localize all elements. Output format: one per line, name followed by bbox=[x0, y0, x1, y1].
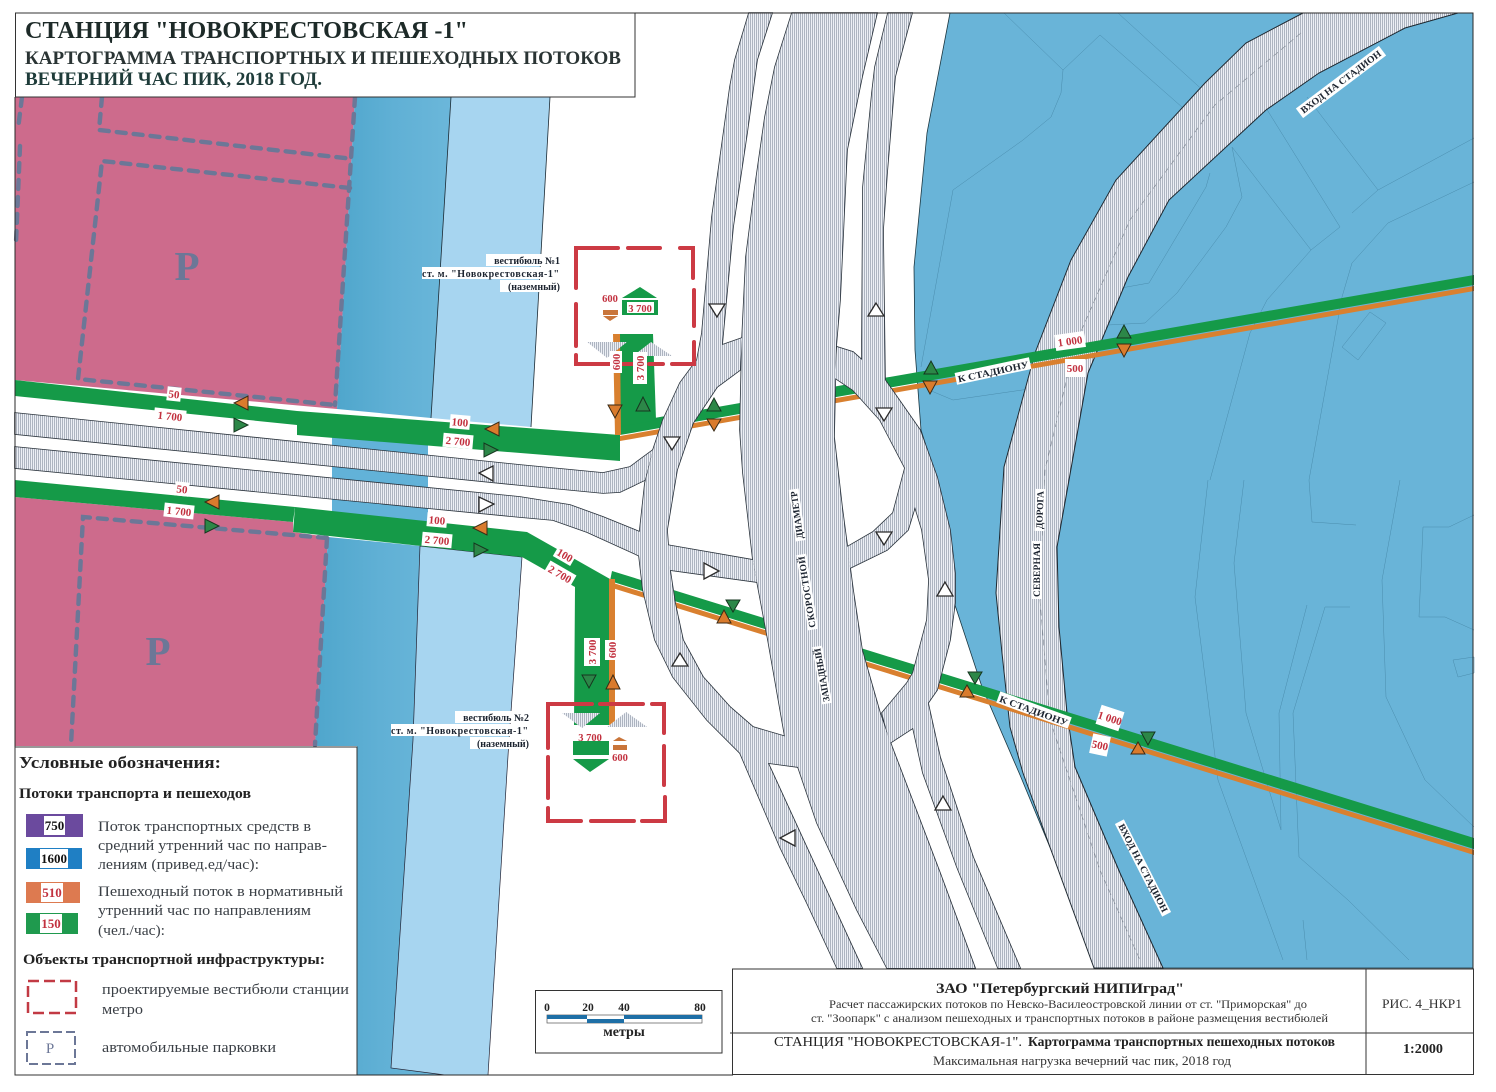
direction arrows: road traffic bbox=[479, 303, 953, 846]
600 stem 1: 600 bbox=[611, 353, 623, 370]
2700 lower: 2 700 bbox=[424, 534, 450, 548]
swatch 510 bbox=[26, 882, 80, 903]
swatch 1600: 1600 bbox=[41, 851, 67, 866]
road: Severnaya doroga bbox=[996, 13, 1458, 968]
to the stadium 1: К СТАДИОНУ bbox=[957, 361, 1030, 385]
entrance hatches bbox=[562, 713, 600, 728]
road centre dashes bbox=[1040, 33, 1301, 960]
500 east 2 bbox=[1089, 733, 1111, 757]
road name zapadny: ЗАПАДНЫЙ bbox=[811, 647, 833, 703]
pedestrian flow: east band 2 bbox=[609, 571, 1474, 855]
pedestrian flow: stem to vestibule 1 bbox=[613, 334, 656, 435]
title panel bbox=[16, 13, 635, 97]
road name skorostnoy: СКОРОСТНОЙ bbox=[795, 555, 819, 628]
figure number: РИС. 4_НКР1 bbox=[1382, 996, 1462, 1011]
entrance hatches bbox=[587, 342, 627, 358]
swatch 750: 750 bbox=[45, 818, 64, 833]
swatch 1600 bbox=[26, 848, 82, 869]
vestibule description bbox=[102, 982, 349, 1018]
subtitle: КАРТОГРАММА ТРАНСПОРТНЫХ И ПЕШЕХОДНЫХ ПОТОКОВ bbox=[25, 49, 621, 69]
2700 diagonal bbox=[544, 560, 576, 588]
project line 1: Расчет пассажирских потоков по Невско-Василеостровской линии от ст. "Приморская" до bbox=[829, 999, 1307, 1011]
scale numbers: 0 bbox=[544, 1002, 550, 1014]
label: vestibule 2: ст. м. "Новокрестовская-1" bbox=[391, 726, 528, 737]
subtitle second line: ВЕЧЕРНИЙ ЧАС ПИК, 2018 ГОД. bbox=[25, 68, 322, 90]
scale unit: метры bbox=[603, 1025, 645, 1040]
500 east 1 bbox=[1065, 359, 1085, 377]
label: parking P lower: P bbox=[145, 628, 171, 674]
to the stadium 1 bbox=[955, 357, 1032, 386]
drawing scale: 1:2000 bbox=[1403, 1041, 1443, 1056]
scale numbers: 40 bbox=[618, 1002, 630, 1014]
interchange roads bbox=[15, 13, 1020, 968]
pedestrian flow description bbox=[98, 884, 343, 939]
pedestrian flow description: Пешеходный поток в нормативный bbox=[98, 884, 343, 900]
transport flow description: лениям (привед.ед/час): bbox=[98, 857, 259, 873]
100 diagonal: 100 bbox=[554, 547, 575, 565]
stadium entrance north: ВХОД НА СТАДИОН bbox=[1299, 49, 1384, 116]
green arrow house bbox=[622, 287, 657, 298]
100 upper: 100 bbox=[451, 416, 469, 430]
zone: west water and embankment bbox=[315, 97, 550, 1075]
scale segments bbox=[547, 1015, 702, 1023]
2700 diagonal: 2 700 bbox=[546, 563, 574, 586]
500 east 1: 500 bbox=[1067, 363, 1084, 375]
vestibule 2 marker: 600 bbox=[612, 753, 628, 764]
sheet title bbox=[774, 1034, 1335, 1049]
to the stadium 2 bbox=[996, 691, 1072, 730]
legend subheading objects: Объекты транспортной инфраструктуры: bbox=[23, 952, 325, 968]
transport flow description: Поток транспортных средств в bbox=[98, 819, 311, 835]
transport flow description bbox=[98, 819, 327, 873]
road names bbox=[788, 46, 1386, 917]
label: parking P upper: P bbox=[174, 243, 200, 289]
stadium entrance south: ВХОД НА СТАДИОН bbox=[1115, 823, 1169, 915]
flow value labels bbox=[153, 331, 1125, 757]
parking description: автомобильные парковки bbox=[102, 1040, 276, 1056]
scale bar bbox=[536, 990, 722, 1053]
drawing title block bbox=[730, 969, 1474, 1074]
organisation: ЗАО "Петербургский НИПИград" bbox=[936, 981, 1184, 997]
symbol: vestibule bbox=[28, 981, 76, 1013]
label: vestibule 1: вестибюль №1 bbox=[494, 256, 560, 267]
1700 upper: 1 700 bbox=[157, 410, 183, 424]
1000 east 2: 1 000 bbox=[1096, 709, 1124, 729]
50 lower bbox=[174, 481, 190, 497]
legend subheading flows: Потоки транспорта и пешеходов bbox=[19, 786, 251, 802]
600 stem 1 bbox=[610, 351, 623, 373]
direction arrows: pedestrians green bbox=[205, 325, 1155, 745]
vestibule 1 marker bbox=[576, 248, 694, 364]
parking boundaries: upper bbox=[16, 97, 355, 405]
50 upper: 50 bbox=[168, 388, 180, 402]
label: vestibule 2 bbox=[391, 711, 530, 750]
label: vestibule 1 bbox=[422, 254, 561, 293]
pedestrian flow: lower west road and stem bbox=[15, 480, 615, 725]
sheet title: Картограмма транспортных пешеходных потоков bbox=[1028, 1034, 1335, 1049]
50 lower: 50 bbox=[176, 483, 188, 497]
legend title: Условные обозначения: bbox=[19, 753, 221, 772]
road name diametr: ДИАМЕТР bbox=[790, 490, 806, 539]
100 lower: 100 bbox=[428, 514, 446, 528]
to the stadium 2: К СТАДИОНУ bbox=[998, 695, 1069, 729]
zone: east water area bbox=[914, 13, 1473, 968]
swatch 150: 150 bbox=[41, 916, 61, 931]
swatch 750 bbox=[26, 814, 83, 837]
1000 east 2 bbox=[1095, 705, 1125, 731]
swatch 150 bbox=[26, 913, 78, 934]
green arrow: 3 700 bbox=[578, 733, 602, 744]
scale numbers bbox=[544, 1002, 706, 1014]
dashed outline bbox=[548, 704, 665, 821]
project line 2: ст. "Зоопарк" с анализом пешеходных и транспортных потоков в районе размещения вестибюлей bbox=[811, 1013, 1328, 1025]
transport flow description: средний утренний час по направ- bbox=[98, 838, 327, 854]
road name severnaya: СЕВЕРНАЯ bbox=[1033, 543, 1043, 597]
2700 upper: 2 700 bbox=[445, 435, 471, 449]
3700 stem 2: 3 700 bbox=[587, 639, 599, 664]
main title: СТАНЦИЯ "НОВОКРЕСТОВСКАЯ -1" bbox=[25, 18, 468, 44]
3700 stem 1: 3 700 bbox=[635, 355, 647, 380]
label: vestibule 1: (наземный) bbox=[508, 282, 560, 293]
vestibule description: метро bbox=[102, 1002, 143, 1018]
vestibule 2 marker bbox=[548, 704, 665, 821]
label: vestibule 2: вестибюль №2 bbox=[463, 713, 529, 724]
1000 east 1 bbox=[1054, 331, 1086, 351]
swatch 510: 510 bbox=[42, 885, 62, 900]
contour lines in the east area bbox=[921, 13, 1474, 960]
sheet title: СТАНЦИЯ "НОВОКРЕСТОВСКАЯ-1". bbox=[774, 1034, 1022, 1049]
sheet subtitle: Максимальная нагрузка вечерний час пик, 2018 год bbox=[933, 1053, 1231, 1068]
pedestrian flow description: (чел./час): bbox=[98, 923, 165, 939]
50 upper bbox=[166, 386, 182, 402]
scale numbers: 20 bbox=[582, 1002, 594, 1014]
1700 lower: 1 700 bbox=[166, 505, 192, 519]
zone: lower parking area bbox=[15, 497, 328, 746]
3700 stem 2 bbox=[584, 638, 600, 666]
label: vestibule 2: (наземный) bbox=[477, 739, 529, 750]
pedestrian flow: east band 1 bbox=[620, 275, 1474, 441]
3700 stem 1 bbox=[633, 352, 647, 384]
road name doroga: ДОРОГА bbox=[1035, 491, 1047, 529]
vestibule 1 marker: 3 700 bbox=[628, 304, 652, 315]
500 east 2: 500 bbox=[1090, 738, 1110, 754]
symbol: parking: P bbox=[46, 1041, 54, 1057]
vestibule description: проектируемые вестибюли станции bbox=[102, 982, 349, 998]
orange arrow bbox=[613, 737, 627, 741]
orange arrow: 600 bbox=[602, 294, 618, 305]
label: vestibule 1: ст. м. "Новокрестовская-1" bbox=[422, 269, 559, 280]
pedestrian flow: upper west road bbox=[15, 380, 620, 461]
zone: upper parking area bbox=[15, 97, 355, 409]
600 stem 2: 600 bbox=[607, 641, 619, 658]
symbol: parking bbox=[27, 1032, 75, 1064]
1000 east 1: 1 000 bbox=[1057, 334, 1084, 350]
1700 upper bbox=[153, 407, 187, 425]
legend panel bbox=[15, 747, 357, 1075]
dashed outline bbox=[576, 248, 694, 364]
pedestrian flow description: утренний час по направлениям bbox=[98, 903, 311, 919]
parking boundaries: lower bbox=[71, 517, 327, 745]
scale numbers: 80 bbox=[694, 1002, 706, 1014]
direction arrows: pedestrians orange bbox=[205, 344, 1145, 754]
